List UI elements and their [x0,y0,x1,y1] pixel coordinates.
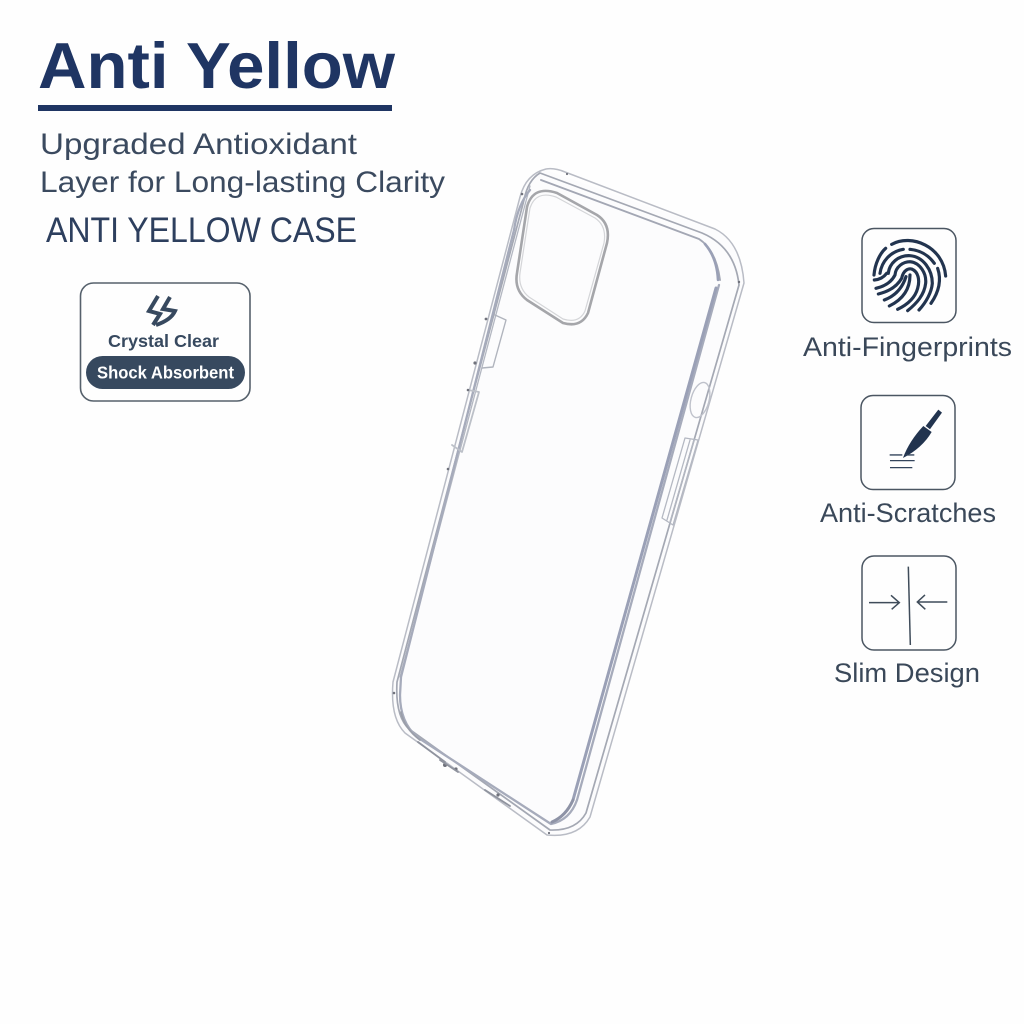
left buttons [482,315,506,368]
phone case illustration [392,169,744,835]
label: Anti-Scratches [820,498,996,528]
icon: lightning bolts [149,296,175,325]
edge details [393,173,740,834]
subtitle text: Layer for Long-lasting Clarity [40,166,445,199]
right side button [662,438,698,525]
badge heading: Crystal Clear [108,331,219,351]
second contour [397,173,739,830]
badge pill [86,356,245,389]
inner screen edge [400,190,719,824]
camera cutout [516,191,608,324]
outer edge [392,169,744,835]
feature: anti-scratches [820,396,996,528]
case body tint [392,170,744,835]
badge pill: Shock Absorbent [97,362,234,382]
icon: fingerprint [862,228,956,322]
feature: slim design [834,556,980,688]
badge: crystal clear shock absorbent [80,283,250,401]
label: Slim Design [834,658,980,688]
icon: slim arrows [862,556,956,650]
title: Anti Yellow [38,29,395,102]
subtitle text: Upgraded Antioxidant [40,128,358,161]
third contour [541,180,720,280]
label: Anti-Fingerprints [803,332,1012,362]
right power button port [687,380,713,420]
icon: knife scratching lines [861,396,955,490]
subtitle text [40,128,445,199]
product label: ANTI YELLOW CASE [46,211,357,250]
feature: anti-fingerprints [803,228,1012,362]
